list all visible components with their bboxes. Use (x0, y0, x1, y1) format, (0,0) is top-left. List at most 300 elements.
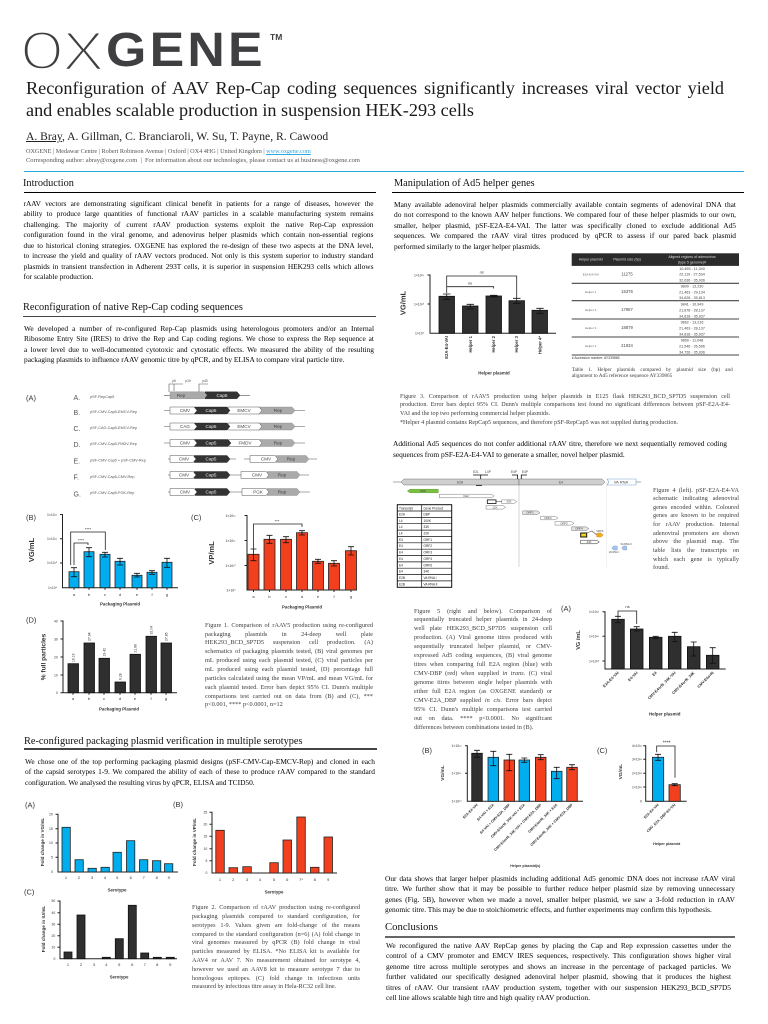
caption: figure 5: well plate HEK293_BCD_SP7D5 suspension cell (414, 625, 552, 632)
figure 3: helper plasmid bar chart: ns (480, 270, 484, 274)
text: Ad5 helper genes: performed similarly to the larger helper plasmids. (394, 242, 541, 250)
construct C: pSF-CAG-Cap5-EMCV-Rep (90, 426, 137, 430)
text: data summary: Our data shows that larger helper plasmids including additional Ad5 genomic DNA does not increase rAAV viral (385, 874, 735, 882)
caption: figure 1: packaging plasmids in 24-deep well plate (205, 631, 373, 638)
construct G: PGK (253, 490, 264, 495)
caption: figure 5: genome titres between single helper plasmids with (414, 679, 552, 686)
text: Ad5 helper genes: do not correspond to the known AAV helper functions. We compared four of these helper plasmids to our own, (394, 210, 736, 219)
construct C: Rep (274, 424, 283, 429)
figure 2C: fold change IU/mL: 7 (144, 962, 147, 967)
table 1: helper plasmids: 34,726 - 35,936 (679, 351, 705, 355)
figure 2A: fold change VG/mL: 9 (168, 875, 171, 880)
table 1: helper plasmids: 9862 - 13,216 (681, 320, 703, 324)
figure 1C: VP/mL bar chart: 1×10¹² (226, 514, 236, 518)
figure 1B: VG/mL bar chart: **** (85, 526, 92, 532)
caption: figure 5: expressed Ad5 coding sequences, (B) viral genome (414, 652, 552, 659)
figure 5C: single helper plasmids bar chart: 4×10¹¹ (632, 744, 643, 748)
table 1: helper plasmids: 18879 (621, 325, 633, 330)
caption: figure 3: VAI and the top two performing commercial helper plasmids. (400, 411, 550, 417)
transcript table: E2B (399, 576, 405, 580)
figure 5A: truncated helper bar chart: E4 (652, 670, 658, 677)
construct F: F. (74, 474, 79, 482)
figure 3: helper plasmid bar chart: 1×10⁹ (415, 332, 425, 336)
figure 1D: percent full particles bar chart: 40 (54, 620, 58, 624)
caption: figure 5: titres when comparing full E2A region (blue) with (414, 661, 552, 668)
construct F: CMV (252, 473, 263, 478)
figure 1D: percent full particles bar chart: c (103, 696, 105, 701)
construct B: pSF-CMV-Cap5-EMCV-Rep (90, 410, 137, 414)
figure 1D: percent full particles bar chart: a (72, 696, 75, 701)
caption: figure 2: AAV4 or AAV 7. No measurement obtained for serotype 4, (192, 957, 360, 964)
text: native Rep-Cap: packaging plasmids to influence rAAV genomic titre by qPCR, and by ELISA to compare viral particle titre. (24, 355, 344, 364)
figure 2C: fold change IU/mL: 1 (67, 962, 70, 967)
caption: figure 1: mL produced using each plasmid tested, (D) percentage full (205, 666, 373, 673)
transcript table: E4 (399, 563, 403, 567)
table 1: helper plasmids: 11275 (621, 272, 633, 276)
plasmid backbone: L4P (485, 470, 491, 474)
figure 1D: percent full particles bar chart: g (165, 696, 167, 701)
figure 2C: fold change IU/mL: 40 (52, 911, 55, 915)
figure 2C: fold change IU/mL: 9 (169, 962, 172, 967)
figure 1D: percent full particles bar chart: e (134, 696, 137, 701)
transcript table: E2A (399, 512, 406, 516)
caption: figure 2: compared to the standard configuration (n=6) (A) fold change in (192, 931, 360, 938)
caption: figure 5: production. (A) Viral genome titres produced with (414, 634, 552, 641)
figure 5A: truncated helper bar chart: CMV-E4orf6 (697, 671, 715, 689)
figure 1D: percent full particles bar chart: 0 (56, 691, 58, 695)
transcript table: L4 (399, 525, 403, 529)
figure 1D: percent full particles bar chart: % full particles (40, 633, 48, 680)
panel: introduction (23, 178, 376, 281)
panel: manipulation of Ad5 helper genes (385, 178, 744, 914)
table 1: helper plasmids: 32,636 - 35,936 (679, 279, 705, 283)
gene transcripts: ORF3 (560, 521, 568, 525)
caption: figure 2: however we used an AAV8 kit to measure serotype 7 due to (192, 966, 360, 973)
figure 2A: fold change VG/mL: 15 (49, 827, 53, 831)
transcript table: L4 (399, 532, 403, 536)
figure 2B: fold change VP/mL: 5 (273, 877, 276, 882)
figure 5C: single helper plasmids bar chart: VG/mL (618, 764, 624, 779)
heading: serotype verification: Re-configured packaging plasmid verification in multiple serotypes (24, 736, 303, 747)
figure 2B: fold change VP/mL: 6 (286, 877, 289, 882)
caption: figure 3: Figure 3. Comparison of rAAV5 production using helper plasmids in E125 flask HEK293_BCD_SP7D5 suspension cell (400, 394, 730, 400)
figure 2B: fold change VP/mL: Fold change in VP/mL (192, 818, 197, 866)
caption: figure 5: out on data. **** p<0.0001. No significant (414, 715, 552, 722)
construct D (74, 440, 305, 449)
table 1: helper plasmids: 21,546 - 26,596 (679, 344, 705, 348)
caption: figure 1 (205, 622, 373, 708)
construct D: CMV (180, 441, 191, 446)
construct F: Cap5 (206, 473, 217, 478)
table 1: helper plasmids: Helper 1 (585, 290, 597, 294)
gene transcripts: VA RNA I (609, 550, 620, 554)
figure 1A: plasmid schematics: (A) (26, 394, 36, 402)
figure 5B: full E2A versus CMV-DBP bar chart: CMV-E4orf6_34K-VAI + CMV-E2A_DBP (493, 802, 543, 852)
affiliation and contact (26, 148, 360, 164)
text: native Rep-Cap (24, 324, 374, 364)
caption: figure 2: packaging plasmids compared to standard configuration, for (192, 913, 360, 920)
caption: figure 1: particles calculated using the mean VP/mL and mean VG/mL for (205, 675, 373, 682)
figure 1B: VG/mL bar chart: 1×10¹⁰ (47, 561, 58, 565)
figure 2B: fold change VP/mL: 2 (232, 877, 235, 882)
caption: figure 4: table lists the transcripts on (653, 547, 739, 554)
construct A: p40 (202, 379, 208, 383)
figure 2A: fold change VG/mL: 3 (91, 875, 94, 880)
figure 2B: fold change VP/mL: 7* (299, 877, 303, 882)
figure 1D: percent full particles bar chart: 27.85 (164, 632, 168, 641)
construct F: Rep (278, 473, 287, 478)
figure 5A: truncated helper bar chart: E2A-E4-VAI (602, 671, 620, 688)
figure 2B: fold change VP/mL: 20 (204, 822, 207, 826)
text: serotype verification: We chose one of the top performing packaging plasmid designs (pSF-CMV-Cap-EMCV-Rep) and cloned in each (25, 756, 375, 766)
header divider (24, 171, 744, 172)
construct C: CAG (180, 424, 190, 429)
text: Ad5 helper genes: smaller, helper plasmid, pSF-E2A-E4-VAI. The latter was specifically cloned to exclude additional Ad5 (394, 220, 736, 230)
transcript table: VA RNA II (424, 582, 438, 586)
figure 5A: truncated helper bar chart: 1×10¹¹ (589, 635, 600, 639)
table 1: helper plasmids: 9841 - 10,949 (681, 302, 703, 306)
table 1: helper plasmids: Helper 4 (585, 344, 597, 348)
figure 3: helper plasmid bar chart: ns (468, 280, 472, 286)
figure 1C: VP/mL bar chart: (C) (191, 513, 202, 522)
figure 3: helper plasmid bar chart: Helper 3 (514, 335, 519, 353)
figure 2B: fold change VP/mL: 0 (206, 871, 208, 875)
text: additional Ad5 sequences (393, 439, 727, 458)
figure 5A: truncated helper bar chart: E4-VAI (627, 671, 639, 682)
construct E: CMV (261, 457, 272, 462)
figure 5A: truncated helper bar chart: (A) (561, 604, 572, 613)
figure 5B: full E2A versus CMV-DBP bar chart: E2A-E4-VAI (462, 803, 479, 820)
text: introduction: challenging. The majority of current rAAV production systems exploit the native Rep-Cap expression (24, 220, 374, 228)
gene transcripts: ORF6 (597, 529, 604, 533)
construct G: pSF-CMV-Cap5-PGK-Rep (90, 491, 134, 495)
figure 2B: fold change VP/mL: 8 (314, 877, 317, 882)
construct E (74, 456, 317, 466)
figure 1D: percent full particles bar chart: f (150, 696, 152, 701)
table 1: helper plasmids: Plasmid size (bp) (613, 258, 641, 262)
figure 3: helper plasmid bar chart: VG/mL (398, 290, 408, 315)
figure 2C: fold change IU/mL: Serotype (110, 974, 129, 980)
figure 5A: truncated helper bar chart: CMV-E4orf6_34K (671, 671, 696, 695)
figure 2C: fold change IU/mL: 8 (156, 962, 159, 967)
construct E: pSF-CMV-Cap5 + pSF-CMV-Rep (90, 458, 146, 462)
caption: figure 2: Figure 2. Comparison of rAAV production using re-configured (192, 904, 360, 911)
figure 1B: VG/mL bar chart: **** (78, 538, 85, 542)
figure 2B: fold change VP/mL: 3 (246, 877, 249, 882)
caption: figure 5: 95% CI. Dunn's multiple comparisons test carried (414, 706, 552, 713)
construct F (74, 472, 309, 482)
figure 1C: VP/mL bar chart: d (301, 594, 303, 599)
text: introduction: for scalable production. (24, 272, 93, 281)
figure 5A: truncated helper bar chart: Helper plasmid (649, 712, 681, 716)
transcript table: Transcript (399, 506, 413, 510)
figure 5B: full E2A versus CMV-DBP bar chart: Helper plasmid(s) (510, 864, 541, 868)
table 1: helper plasmids: 17967 (621, 307, 633, 312)
figure 2C: fold change IU/mL: 6 (131, 962, 134, 967)
caption: figure 4 (653, 486, 739, 571)
caption: figure 4: Figure 4 (left). pSF-E2A-E4-VA (653, 486, 739, 494)
figure 1B: VG/mL bar chart: c (104, 592, 106, 597)
figure 2A: fold change VG/mL: 0 (51, 870, 53, 874)
caption: figure 5: CMV-DBP (red) when supplied in trans. (C) viral (414, 670, 552, 677)
figure 2B: fold change VP/mL: Serotype (265, 890, 284, 894)
figure 1C: VP/mL bar chart: VP/mL (207, 541, 216, 565)
figure 1B: VG/mL bar chart: 1×10¹² (47, 513, 58, 517)
gene transcripts: IVa2 (463, 494, 469, 498)
caption: figure 2: serotypes 1-9. Values given are fold-change of the means (192, 922, 360, 929)
affiliation and contact: Corresponding author: abray@oxgene.com | For information about our technologies, please contact us at business@oxgene.com (26, 157, 360, 164)
plasmid backbone: E4P (511, 470, 517, 474)
figure 1B: VG/mL bar chart: (B) (26, 513, 36, 522)
figure 2B: fold change VP/mL: 25 (204, 810, 207, 814)
figure 2C: fold change IU/mL (24, 888, 177, 980)
figure 1B: VG/mL bar chart: g (166, 592, 168, 597)
heading: introduction: Introduction (23, 178, 74, 189)
figure 5C: single helper plasmids bar chart: (C) (597, 746, 608, 755)
figure 5A: truncated helper bar chart: 1×10¹⁰ (589, 659, 600, 663)
caption: figure 2: homologous epitopes. (C) fold change in infectious units (192, 975, 360, 982)
figure 2C: fold change IU/mL: 4 (105, 962, 108, 967)
text: conclusions (386, 940, 731, 1002)
caption: figure 5: Figure 5 (right and below). Comparison of (414, 608, 552, 614)
affiliation and contact: OXGENE | Medawar Centre | Robert Robinson Avenue | Oxford | OX4 4HG | United Kingdom | www.oxgene.com (26, 148, 311, 155)
figure 1D: percent full particles bar chart: 6.28 (118, 673, 122, 680)
transcript table: 100K (424, 519, 432, 523)
caption: figure 4: which each gene is typically (653, 556, 739, 563)
caption: figure 3: *Helper 4 plasmid contains RepCap5 sequences, and therefore pSF-RepCap5 was not supplied during production. (400, 420, 678, 426)
figure 1B: VG/mL bar chart: d (119, 592, 121, 597)
logo: OXGENE (21, 20, 282, 82)
figure 2A: fold change VG/mL: 4 (104, 875, 107, 880)
figure 5A: truncated helper bar chart: ns (625, 604, 630, 609)
figure 1C: VP/mL bar chart: *** (275, 518, 280, 524)
figure 1B: VG/mL bar chart: Packaging Plasmid (100, 602, 140, 606)
text: introduction (24, 198, 374, 281)
caption: figure 5: CMV-E2A_DBP supplied in cis. Error bars depict (414, 697, 552, 704)
text: conclusions: genome titre across multiple serotypes and shows an increase in the percentage of packaged particles. We (386, 962, 731, 970)
figure 5A: truncated helper bar chart: VG /mL (576, 630, 582, 650)
gene transcripts: ORF1 (526, 511, 534, 515)
transcript table: L4 (399, 519, 403, 523)
table 1: helper plasmids: 34,818 - 35,937 (679, 315, 705, 319)
figure 2C: fold change IU/mL: 2 (80, 962, 83, 967)
figure 1C: VP/mL bar chart: e (317, 594, 320, 599)
figure 1C: VP/mL bar chart: a (252, 594, 255, 599)
figure 1B: VG/mL bar chart: VG/mL (27, 537, 36, 562)
heading: conclusions: Conclusions (385, 921, 438, 933)
text: conclusions: cell line allows scalable high titre and high quality rAAV production. (386, 993, 590, 1002)
figure 5C: single helper plasmids bar chart: 0 (640, 800, 642, 804)
table 1: helper plasmids: # Accession number: AY339865 (572, 356, 620, 360)
gene transcripts: 22K (493, 505, 498, 509)
figure 2C: fold change IU/mL: 5 (118, 962, 121, 967)
transcript table: E4 (399, 538, 403, 542)
panel: reconfiguration of native Rep-Cap (23, 302, 376, 712)
figure 3: helper plasmid bar chart: Helper 2 (491, 335, 496, 353)
caption: figure 2: particles measured by ELISA. *No ELISA kit is available for (192, 948, 360, 955)
figure 1C: VP/mL bar chart (191, 513, 357, 610)
figure 1D: percent full particles bar chart: 32.04 (150, 626, 154, 634)
plasmid backbone: E2A (457, 480, 464, 484)
caption: figure 2: viral genomes measured by qPCR (B) fold change in viral (192, 939, 360, 946)
text: additional Ad5 sequences: Additional Ad5 sequences do not confer additional rAAV titre, therefore we next sequentially removed coding (393, 439, 727, 448)
table 1: helper plasmids: Helper plasmid (579, 258, 603, 262)
figure 4: plasmid map and transcript table (393, 470, 641, 588)
caption: figure 5 (414, 608, 552, 731)
table 1: helper plasmids: 21,463 - 28,137 (679, 326, 705, 330)
construct D: Cap5 (206, 441, 217, 446)
title: Reconfiguration of AAV Rep-Cap coding sequences significantly increases viral vector yield (26, 78, 724, 98)
gene transcripts: ORF2 (544, 516, 552, 520)
construct B: EMCV (237, 408, 252, 413)
plasmid backbone: E2L (473, 470, 479, 474)
transcript table (397, 505, 452, 587)
text: conclusions: titres of rAAV. Our transient rAAV production system, together with our suspension HEK293_BCD_SP7D5 (386, 982, 731, 992)
heading: Ad5 helper genes: Manipulation of Ad5 helper genes (394, 178, 535, 189)
caption: figure 1: comparisons test carried out on data from (B) and (C), *** (205, 693, 373, 700)
panel: conclusions (385, 921, 735, 1002)
figure 2B: fold change VP/mL (173, 800, 337, 894)
figure 5C: single helper plasmids bar chart: 1×10¹¹ (632, 785, 643, 789)
table 1: helper plasmids: (type 5 genome)# (678, 260, 706, 264)
figure 1D: percent full particles bar chart: 19.42 (102, 648, 106, 656)
authors: A. Bray, A. Gillman, C. Branciaroli, W. Su, T. Payne, R. Cawood (26, 130, 328, 143)
figure 1D: percent full particles bar chart: Packaging Plasmid (99, 706, 139, 712)
caption: figure 1: mL produced using each plasmid tested, (C) viral particles per (205, 657, 373, 664)
construct B (74, 407, 305, 417)
text: Ad5 helper genes: sequences. We compared the rAAV viral titres produced by qPCR to assess if our pared back plasmid (394, 231, 736, 240)
text: serotype verification: of the capsid serotypes 1-9. We compared the ability of each of these to produce rAAV compared to the standard (25, 767, 375, 776)
text: native Rep-Cap: We developed a number of re-configured Rep-Cap plasmids using heterologous promoters and/or an Internal (24, 324, 374, 333)
construct A: pSF-RepCap5 (90, 395, 114, 399)
text: data summary: genomic titre. This may be due to stoichiometric effects, and further experiments may confirm this hypothesis. (385, 905, 712, 914)
caption: figure 4: adenoviral promoters are shown (653, 530, 739, 537)
figure 2C: fold change IU/mL: 10 (52, 946, 55, 950)
transcript table: 33K (424, 525, 430, 529)
text: data summary: titre. We further show that it may be possible to further reduce helper plasmid size by removing unnecessary (385, 884, 735, 893)
text: introduction: plasmids in transient transfection in Adherent 293T cells, it is superior in suspension HEK293 cells which allows (24, 262, 374, 270)
text: data summary: genes (Fig. 5B), however when we made a novel, smaller helper plasmid, we saw a 3-fold reduction in rAAV (385, 894, 735, 904)
table 1: helper plasmids: Aligned regions of adenovirus (668, 255, 716, 259)
caption: figure 3: production. Error bars depict 95% CI. Dunn's multiple comparisons test found no significant differences between pSF-E2A-E4- (400, 402, 730, 408)
text: serotype verification: configuration. We analysed the resulting virus by qPCR, ELISA and TCID50. (25, 778, 255, 786)
table 1: helper plasmids: Helper 2 (585, 308, 597, 312)
title (26, 78, 724, 120)
table 1: helper plasmids: 21,463 - 29,134 (679, 290, 705, 294)
figure 1C: VP/mL bar chart: f (333, 594, 335, 599)
caption: figure 4: genes encoded within. Coloured (653, 504, 739, 511)
figure 2A: fold change VG/mL: 2 (78, 875, 81, 880)
construct G: Cap5 (206, 490, 217, 495)
construct C: EMCV (237, 424, 252, 429)
table 1: helper plasmids: 9800 - 13,230 (681, 284, 703, 288)
gene transcripts (407, 489, 632, 554)
table 1: helper plasmids: 21,878 - 28,137 (679, 308, 705, 312)
construct A: p19 (185, 379, 191, 383)
figure 2C: fold change IU/mL: 50 (52, 899, 55, 903)
figure 1B: VG/mL bar chart: f (151, 592, 153, 597)
figure 5B: full E2A versus CMV-DBP bar chart (422, 744, 583, 868)
figure 2A: fold change VG/mL: 8 (156, 875, 159, 880)
figure 1C: VP/mL bar chart: 1×10¹¹ (226, 539, 236, 543)
table 1: helper plasmids: Helper 3 (585, 326, 597, 330)
panel: serotype verification (24, 736, 377, 990)
construct G: CMV (180, 490, 191, 495)
figure 5C: single helper plasmids bar chart: 3×10¹¹ (632, 758, 643, 762)
figure 3: helper plasmid bar chart (398, 270, 556, 376)
figure 5C: single helper plasmids bar chart: CMV_E2A_DBP-E4-VAI (646, 803, 676, 833)
figure 2A: fold change VG/mL: Fold change in VG/mL (40, 818, 45, 866)
figure 2A: fold change VG/mL: 5 (116, 875, 119, 880)
figure 5B: full E2A versus CMV-DBP bar chart: VG/mL (440, 765, 446, 781)
transcript table: Gene Product (424, 506, 443, 510)
figure 2B: fold change VP/mL: 5 (206, 859, 208, 863)
construct D: Rep (274, 441, 283, 446)
transcript table: ORF4 (424, 557, 432, 561)
transcript table: E4 (399, 557, 403, 561)
figure 1D: percent full particles bar chart: 27.94 (88, 632, 92, 641)
figure 2B: fold change VP/mL: 1 (219, 877, 222, 882)
construct D: D. (74, 442, 81, 449)
transcript table: E4 (399, 544, 403, 548)
gene transcripts: VA RNA II (620, 542, 632, 546)
text: conclusions: control of a CMV promoter and EMCV IRES sequences, respectively. This configuration shows higher viral (386, 951, 731, 960)
figure 5A: truncated helper bar chart: 1×10¹² (589, 610, 600, 614)
text: serotype verification (25, 756, 375, 786)
figure 5A: truncated helper bar chart: CMV-E4orf6_34K-VAI (647, 671, 677, 700)
transcript table: DBP (424, 512, 430, 516)
table 1: helper plasmids: E2A-E4-VAI (583, 272, 599, 276)
figure 1C: VP/mL bar chart: b (268, 594, 271, 599)
construct A (74, 379, 250, 402)
caption: figure 2 (192, 904, 360, 990)
heading: native Rep-Cap: Reconfiguration of native Rep-Cap coding sequences (23, 302, 243, 313)
caption: figure 2: measured by infectious titre assay in Hela-RC32 cell line. (192, 983, 336, 990)
figure 2C: fold change IU/mL: 3 (93, 962, 96, 967)
construct C (74, 423, 305, 433)
caption: figure 3 (400, 394, 730, 426)
caption: figure 1: schematics of packaging plasmids tested, (B) viral genomes per (205, 648, 373, 655)
text: Ad5 helper genes (394, 200, 736, 250)
construct E: Rep (287, 457, 296, 462)
caption: figure 4: above the plasmid map. The (653, 538, 739, 545)
transcript table: E4 (399, 570, 403, 574)
table 1: helper plasmids: 34,628 - 35,813 (679, 296, 705, 300)
construct G (74, 488, 310, 498)
caption: figure 4: found. (653, 564, 669, 571)
figure 2B: fold change VP/mL: 15 (204, 834, 207, 838)
transcript table: VA RNA I (424, 576, 437, 580)
construct B: B. (74, 410, 80, 417)
construct A: A. (74, 395, 80, 402)
table 1: helper plasmids: 10,455 - 11,340 (679, 267, 705, 271)
caption: figure 5: differences between combinations tested in (B). (414, 724, 533, 731)
figure 2A: fold change VG/mL: 7 (143, 875, 146, 880)
figure 2A: fold change VG/mL (25, 800, 178, 892)
figure 2B: fold change VP/mL: (B) (173, 800, 184, 809)
logo: OXGENE: X (62, 20, 105, 82)
caption: figure 4: schematic indicating adenoviral (653, 495, 739, 502)
figure 5B: full E2A versus CMV-DBP bar chart: 1×10¹⁰ (452, 800, 462, 804)
figure 2A: fold change VG/mL: 20 (49, 812, 53, 816)
figure 1C: VP/mL bar chart: Packaging Plasmid (282, 604, 322, 610)
text: native Rep-Cap: Ribosome Entry Site (IRES) to drive the Rep and Cap coding regions. We chose to express the Rep sequence at (24, 334, 374, 343)
table 1: helper plasmids: 9850 - 11,048 (681, 338, 703, 342)
figure 1D: percent full particles bar chart: d (119, 696, 121, 701)
figure 5C: single helper plasmids bar chart: **** (663, 740, 671, 746)
figure 5A: truncated helper bar chart (561, 604, 726, 716)
figure 1B: VG/mL bar chart: 1×10¹¹ (47, 537, 58, 541)
